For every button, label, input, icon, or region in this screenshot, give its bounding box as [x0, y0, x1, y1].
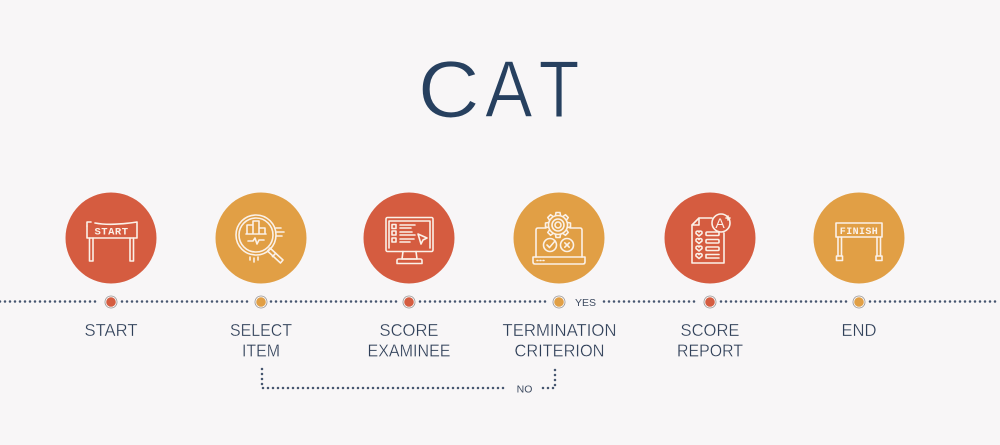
step: select item [216, 192, 306, 360]
node: start [105, 296, 117, 308]
dotted loop connector [262, 369, 555, 388]
icon: finish banner [836, 223, 882, 260]
step: score examinee [364, 192, 454, 360]
icon: laptop with gear [533, 212, 585, 264]
icon circle: end [814, 192, 904, 284]
timeline: dotted line [0, 300, 1000, 303]
title: T [539, 44, 579, 134]
label: score report: SCORE [680, 320, 740, 340]
icon: start banner [87, 222, 137, 261]
label: end: END [842, 320, 876, 340]
title: C [418, 43, 480, 134]
icon circle: termination criterion [514, 192, 604, 284]
title: A [485, 45, 533, 135]
icon circle: score examinee [364, 192, 454, 284]
label: yes branch: YES [575, 297, 596, 309]
node: score report [704, 296, 716, 308]
icon circle: select item [216, 192, 306, 284]
node: termination criterion [553, 296, 565, 308]
label: score examinee: EXAMINEE [368, 340, 450, 360]
icon: monitor with cursor [386, 218, 433, 264]
icon circle: start [66, 192, 156, 284]
icon circle: score report [664, 192, 756, 284]
loop back: no branch [262, 369, 555, 396]
step: score report [664, 192, 756, 360]
step: termination criterion [502, 192, 616, 360]
label: termination criterion: TERMINATION [502, 320, 616, 340]
icon: graded report [692, 214, 730, 263]
label: no branch: NO [517, 384, 532, 396]
node: select item [255, 296, 267, 308]
label: score report: REPORT [677, 340, 743, 360]
label: select item: ITEM [242, 340, 280, 360]
label: select item: SELECT [230, 320, 292, 340]
step: start [66, 192, 156, 340]
label: termination criterion: CRITERION [514, 340, 604, 360]
icon: start banner: START [94, 226, 129, 238]
icon: magnifier with chart [236, 215, 284, 263]
icon: finish banner: FINISH [840, 227, 878, 238]
node: end [853, 296, 865, 308]
icon: graded report: A [715, 215, 725, 231]
step: end [814, 192, 904, 340]
label: start: START [84, 320, 138, 340]
label: score examinee: SCORE [380, 320, 438, 340]
title [418, 43, 579, 135]
node: score examinee [403, 296, 415, 308]
